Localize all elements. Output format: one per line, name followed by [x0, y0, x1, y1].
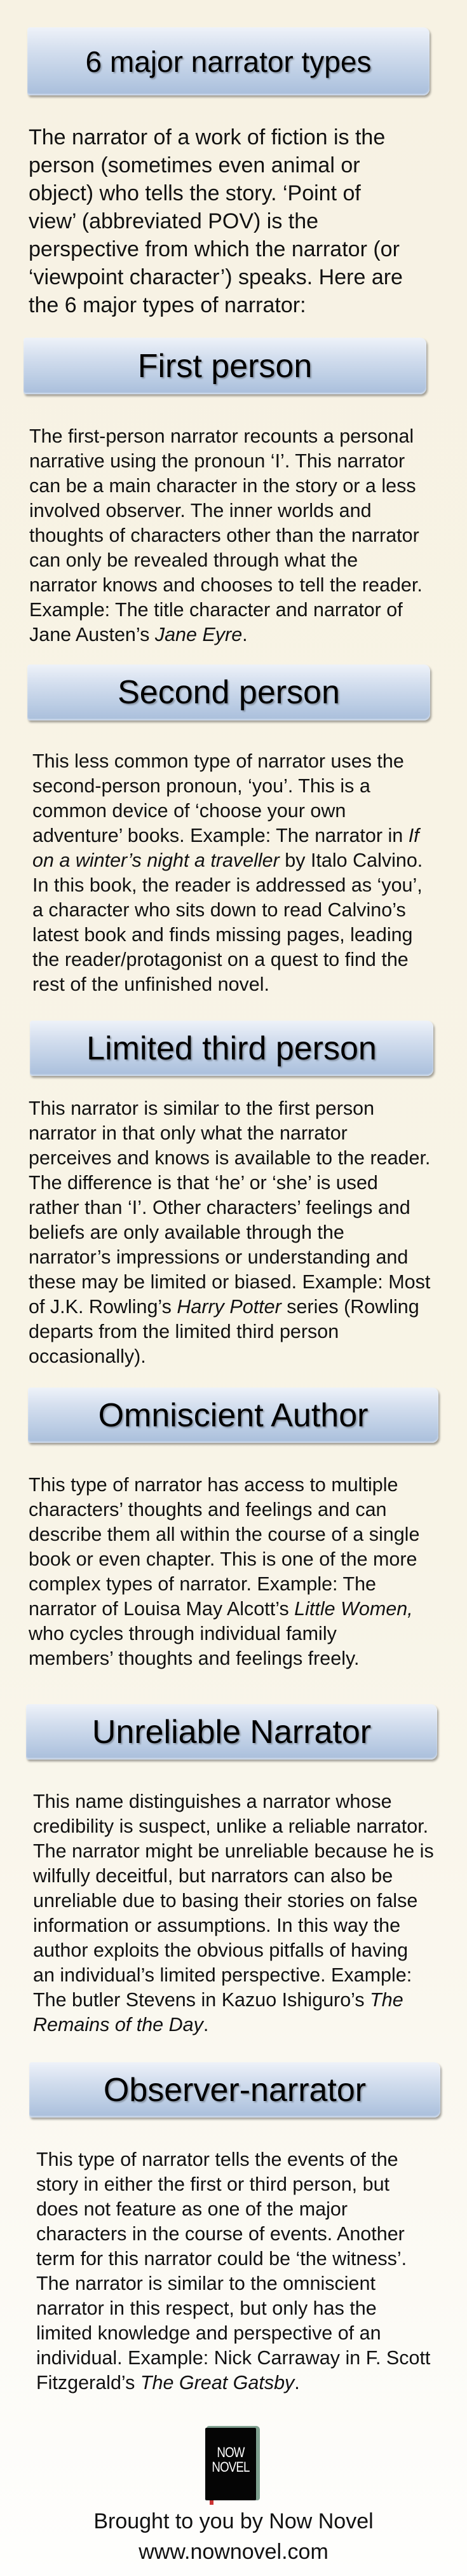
text: unreliable: wilfully deceitful, but narrators can also be: [33, 1865, 393, 1887]
heading: Limited third person: Limited third person: [86, 1030, 377, 1067]
text: unreliable: credibility is suspect, unlike a reliable narrator.: [33, 1815, 428, 1837]
text: omniscient: narrator of Louisa May Alcott’s Little Women,: [29, 1598, 413, 1620]
text: second person: adventure’ books. Example: The narrator in If: [32, 825, 419, 846]
heading: First person: [24, 338, 426, 394]
text: first person: The first-person narrator recounts a personal: [29, 425, 414, 447]
text: first person: narrator knows and chooses to tell the reader.: [29, 574, 423, 596]
heading: Omniscient Author: Omniscient Author: [98, 1396, 368, 1433]
text: limited third person: narrator in that only what the narrator: [29, 1122, 348, 1144]
text: omniscient: complex types of narrator. Example: The: [29, 1573, 376, 1595]
text: first person: thoughts of characters other than the narrator: [29, 525, 419, 546]
text: unreliable: unreliable due to basing their stories on false: [33, 1890, 417, 1911]
footer credit: Brought to you by Now Novel: [93, 2509, 374, 2533]
footer credit: www.nownovel.com: [139, 2540, 328, 2564]
text: omniscient: characters’ thoughts and feelings and can: [29, 1499, 386, 1520]
logo: Now Novel book: [205, 2426, 260, 2505]
heading: Observer-narrator: [29, 2062, 440, 2118]
text: limited third person: narrator’s impressions or understanding and: [29, 1246, 408, 1268]
intro text: object) who tells the story. ‘Point of: [29, 181, 361, 205]
text: first person: can be a main character in the story or a less: [29, 475, 416, 497]
text: limited third person: The difference is that ‘he’ or ‘she’ is used: [29, 1172, 378, 1194]
logo: Now Novel book: NOW: [217, 2444, 245, 2460]
text: unreliable: Remains of the Day.: [33, 2014, 208, 2035]
heading: First person: First person: [138, 347, 312, 384]
text: limited third person: This narrator is similar to the first person: [29, 1098, 374, 1119]
text: unreliable: The narrator might be unreliable because he is: [33, 1840, 434, 1862]
text: limited third person: these may be limited or biased. Example: Most: [29, 1271, 430, 1293]
text: observer: term for this narrator could be ‘the witness’.: [36, 2248, 407, 2269]
footer credit: [93, 2509, 374, 2564]
text: first person: narrative using the pronoun ‘I’. This narrator: [29, 450, 405, 472]
text: first person: involved observer. The inner worlds and: [29, 500, 372, 521]
intro text: the 6 major types of narrator:: [29, 293, 306, 317]
text: unreliable: [33, 1791, 434, 2035]
intro text: person (sometimes even animal or: [29, 153, 360, 177]
text: limited third person: occasionally).: [29, 1346, 146, 1367]
text: limited third person: perceives and knows is available to the reader.: [29, 1147, 430, 1169]
heading: Second person: [27, 665, 430, 720]
text: limited third person: [29, 1098, 431, 1367]
text: observer: characters in the course of events. Another: [36, 2223, 405, 2245]
text: unreliable: author exploits the obvious pitfalls of having: [33, 1939, 408, 1961]
text: observer: narrator in this respect, but only has the: [36, 2297, 377, 2319]
text: first person: Example: The title character and narrator of: [29, 599, 403, 621]
text: limited third person: of J.K. Rowling’s Harry Potter series (Rowling: [29, 1296, 419, 1318]
heading: Second person: Second person: [118, 674, 340, 711]
text: observer: individual. Example: Nick Carraway in F. Scott: [36, 2347, 430, 2369]
text: second person: [32, 750, 423, 995]
heading: Observer-narrator: Observer-narrator: [104, 2072, 366, 2109]
text: limited third person: beliefs are only available through the: [29, 1222, 344, 1243]
text: observer: does not feature as one of the major: [36, 2198, 348, 2220]
text: first person: Jane Austen’s Jane Eyre.: [29, 624, 248, 645]
heading: Omniscient Author: [28, 1388, 438, 1443]
text: second person: common device of ‘choose your own: [32, 800, 346, 822]
text: second person: rest of the unfinished novel.: [32, 974, 269, 995]
text: second person: the reader/protagonist on a quest to find the: [32, 949, 409, 970]
heading: Limited third person: [30, 1021, 433, 1076]
text: second person: on a winter’s night a traveller by Italo Calvino.: [32, 850, 423, 871]
text: second person: a character who sits down to read Calvino’s: [32, 899, 406, 921]
heading: Unreliable Narrator: [26, 1704, 437, 1760]
text: second person: latest book and finds missing pages, leading: [32, 924, 413, 946]
text: unreliable: an individual’s limited perspective. Example:: [33, 1964, 412, 1986]
intro text: [29, 125, 403, 317]
text: second person: In this book, the reader is addressed as ‘you’,: [32, 874, 423, 896]
logo: Now Novel book: NOVEL: [212, 2459, 250, 2475]
title banner: [27, 27, 430, 95]
text: limited third person: departs from the limited third person: [29, 1321, 339, 1342]
text: limited third person: rather than ‘I’. Other characters’ feelings and: [29, 1197, 410, 1218]
intro text: perspective from which the narrator (or: [29, 237, 400, 261]
text: omniscient: describe them all within the course of a single: [29, 1524, 419, 1545]
text: observer: Fitzgerald’s The Great Gatsby.: [36, 2372, 300, 2393]
text: omniscient: book or even chapter. This is one of the more: [29, 1548, 417, 1570]
text: omniscient: who cycles through individual family: [29, 1623, 337, 1644]
heading: Unreliable Narrator: Unreliable Narrator: [92, 1713, 371, 1750]
intro text: ‘viewpoint character’) speaks. Here are: [29, 265, 403, 289]
text: omniscient: members’ thoughts and feelings freely.: [29, 1648, 359, 1669]
text: observer: This type of narrator tells the events of the: [36, 2149, 398, 2170]
text: omniscient: This type of narrator has access to multiple: [29, 1474, 398, 1496]
title banner: 6 major narrator types: [86, 45, 371, 78]
text: first person: can only be revealed through what the: [29, 549, 358, 571]
text: unreliable: The butler Stevens in Kazuo Ishiguro’s The: [33, 1989, 403, 2011]
text: observer: The narrator is similar to the omniscient: [36, 2273, 376, 2294]
text: observer: [36, 2149, 431, 2393]
intro text: The narrator of a work of fiction is the: [29, 125, 385, 149]
text: first person: [29, 425, 423, 645]
text: second person: second-person pronoun, ‘you’. This is a: [32, 775, 370, 797]
text: unreliable: information or assumptions. In this way the: [33, 1915, 400, 1936]
text: observer: limited knowledge and perspective of an: [36, 2322, 381, 2344]
intro text: view’ (abbreviated POV) is the: [29, 209, 318, 233]
text: omniscient: [29, 1474, 419, 1669]
text: unreliable: This name distinguishes a narrator whose: [33, 1791, 392, 1812]
text: second person: This less common type of narrator uses the: [32, 750, 404, 772]
text: observer: story in either the first or third person, but: [36, 2173, 389, 2195]
